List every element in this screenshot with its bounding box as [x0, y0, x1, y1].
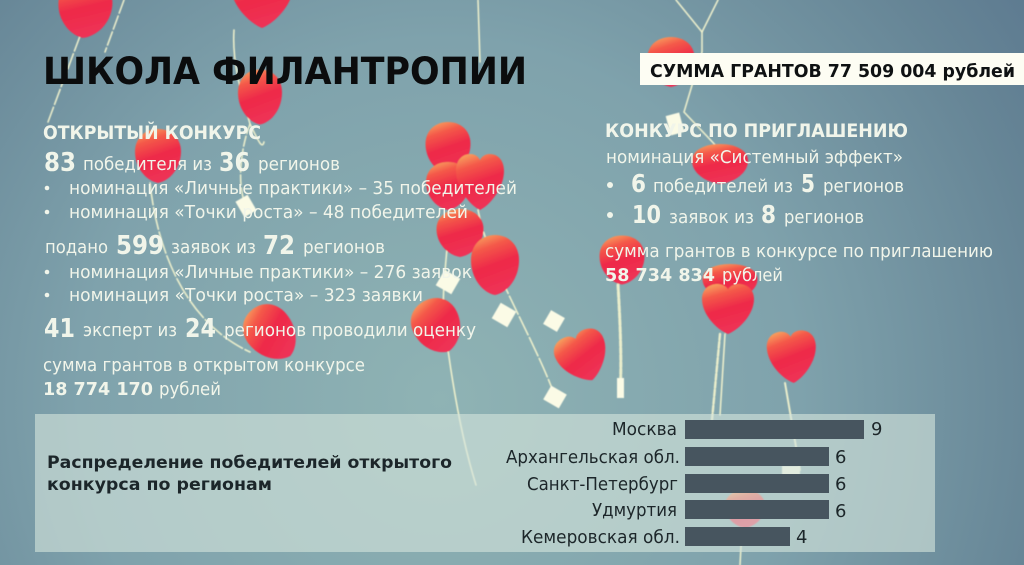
stat line: winners: 36 — [219, 148, 250, 178]
open contest grant sum: рублей — [159, 379, 221, 400]
balloon strings — [48, 0, 800, 565]
applications bullet 1: номинация «Личные практики» – 276 заявок — [69, 262, 472, 283]
bar: Kemerovo: Кемеровская обл. — [521, 527, 680, 548]
invitation bullet 2: 10 — [632, 200, 661, 229]
heading: open contest: ОТКРЫТЫЙ КОНКУРС — [43, 122, 261, 144]
heart balloon 8 — [456, 154, 504, 210]
stat line: applications: регионов — [303, 237, 385, 258]
light tags — [235, 113, 800, 480]
panel: regional distribution — [35, 414, 935, 552]
stat line: applications: подано — [45, 237, 108, 258]
bar chart — [506, 419, 882, 548]
stat line: applications: 72 — [263, 231, 295, 261]
heart balloon 6 — [426, 162, 470, 210]
heart balloon 13 — [692, 144, 748, 184]
heart balloon 2 — [230, 0, 294, 28]
heart balloon 14 — [648, 37, 694, 87]
total grants badge: СУММА ГРАНТОВ 77 509 004 рублей — [650, 61, 1015, 82]
stat line: experts: 41 — [44, 314, 75, 344]
stat line: winners: регионов — [258, 154, 340, 175]
invitation bullet 1: 6 — [631, 169, 646, 198]
stat line: winners: победителя из — [83, 154, 212, 175]
stat line: applications: заявок из — [171, 237, 256, 258]
panel: invitation contest — [605, 121, 993, 286]
heart balloon 10 — [233, 295, 309, 371]
total grants badge — [640, 53, 1024, 85]
stat line: winners: 83 — [44, 148, 76, 178]
heart balloon 3 — [238, 70, 282, 124]
title: ШКОЛА ФИЛАНТРОПИИ — [43, 50, 527, 93]
applications bullet 2: номинация «Точки роста» – 323 заявки — [69, 285, 423, 306]
bar: Moscow: Москва — [612, 419, 677, 440]
stat line: applications: 599 — [116, 231, 164, 261]
heart balloon 4 — [135, 129, 181, 183]
nomination name: номинация «Системный эффект» — [606, 147, 903, 168]
invitation grant sum — [605, 241, 993, 286]
bar: Arkhangelsk: Архангельская обл. — [506, 447, 680, 468]
bar: Moscow — [612, 419, 882, 440]
chart heading: конкурса по регионам — [47, 475, 272, 495]
heart balloon 17 — [702, 284, 754, 334]
invitation bullet 2: регионов — [784, 207, 864, 228]
bar: Udmurtia: 6 — [835, 501, 846, 522]
heart balloon 16 — [702, 264, 758, 300]
panel: open contest — [43, 122, 517, 400]
heart balloon 19 — [725, 490, 765, 528]
heading: invitation contest: КОНКУРС ПО ПРИГЛАШЕНИЮ — [605, 121, 908, 142]
stat line: applications — [45, 231, 385, 261]
invitation bullet 2 — [607, 200, 864, 229]
invitation bullet 1: регионов — [823, 176, 904, 197]
stat line: experts: регионов проводили оценку — [224, 320, 476, 341]
chart heading — [47, 453, 452, 495]
stat line: winners — [44, 148, 340, 178]
invitation bullet 1: 5 — [801, 169, 815, 198]
heart balloon 1 — [55, 0, 115, 40]
bar: Udmurtia: Удмуртия — [592, 500, 677, 521]
stat line: experts: 24 — [185, 314, 216, 344]
invitation bullet 1 — [607, 169, 904, 198]
bar: Saint Petersburg: 6 — [835, 474, 846, 495]
heart balloon 12 — [550, 324, 616, 390]
heart balloon 7 — [436, 209, 484, 257]
invitation grant sum: 58 734 834 — [605, 265, 715, 286]
invitation bullet 1: победителей из — [653, 176, 793, 197]
open contest grant sum — [43, 355, 365, 400]
winners bullet 2: номинация «Точки роста» – 48 победителей — [69, 202, 468, 223]
invitation grant sum: рублей — [722, 265, 783, 286]
heart balloon 5 — [426, 122, 470, 174]
chart heading: Распределение победителей открытого — [47, 453, 452, 473]
stat line: experts: эксперт из — [83, 320, 177, 341]
invitation grant sum: сумма грантов в конкурсе по приглашению — [605, 241, 993, 262]
bar: Saint Petersburg: Санкт-Петербург — [527, 474, 678, 495]
bar: Arkhangelsk — [506, 447, 846, 468]
invitation bullet 2: 8 — [761, 200, 776, 229]
invitation bullet 2: заявок из — [669, 207, 754, 228]
heart balloon 11 — [403, 290, 471, 362]
bar: Udmurtia — [592, 500, 846, 522]
open contest grant sum: 18 774 170 — [43, 379, 153, 400]
heart balloon 18 — [766, 329, 818, 385]
bar: Kemerovo: 4 — [796, 527, 807, 548]
bar: Moscow: 9 — [871, 419, 882, 440]
stat line: experts — [44, 314, 476, 344]
open contest grant sum: сумма грантов в открытом конкурсе — [43, 355, 365, 376]
bar: Saint Petersburg — [527, 474, 846, 495]
bar: Kemerovo — [521, 527, 807, 548]
balloons with strings — [48, 0, 818, 565]
heart balloon 15 — [600, 236, 644, 284]
heart balloon 9 — [471, 235, 519, 295]
winners bullet 1: номинация «Личные практики» – 35 победителей — [69, 178, 517, 199]
bar: Arkhangelsk: 6 — [835, 447, 846, 468]
